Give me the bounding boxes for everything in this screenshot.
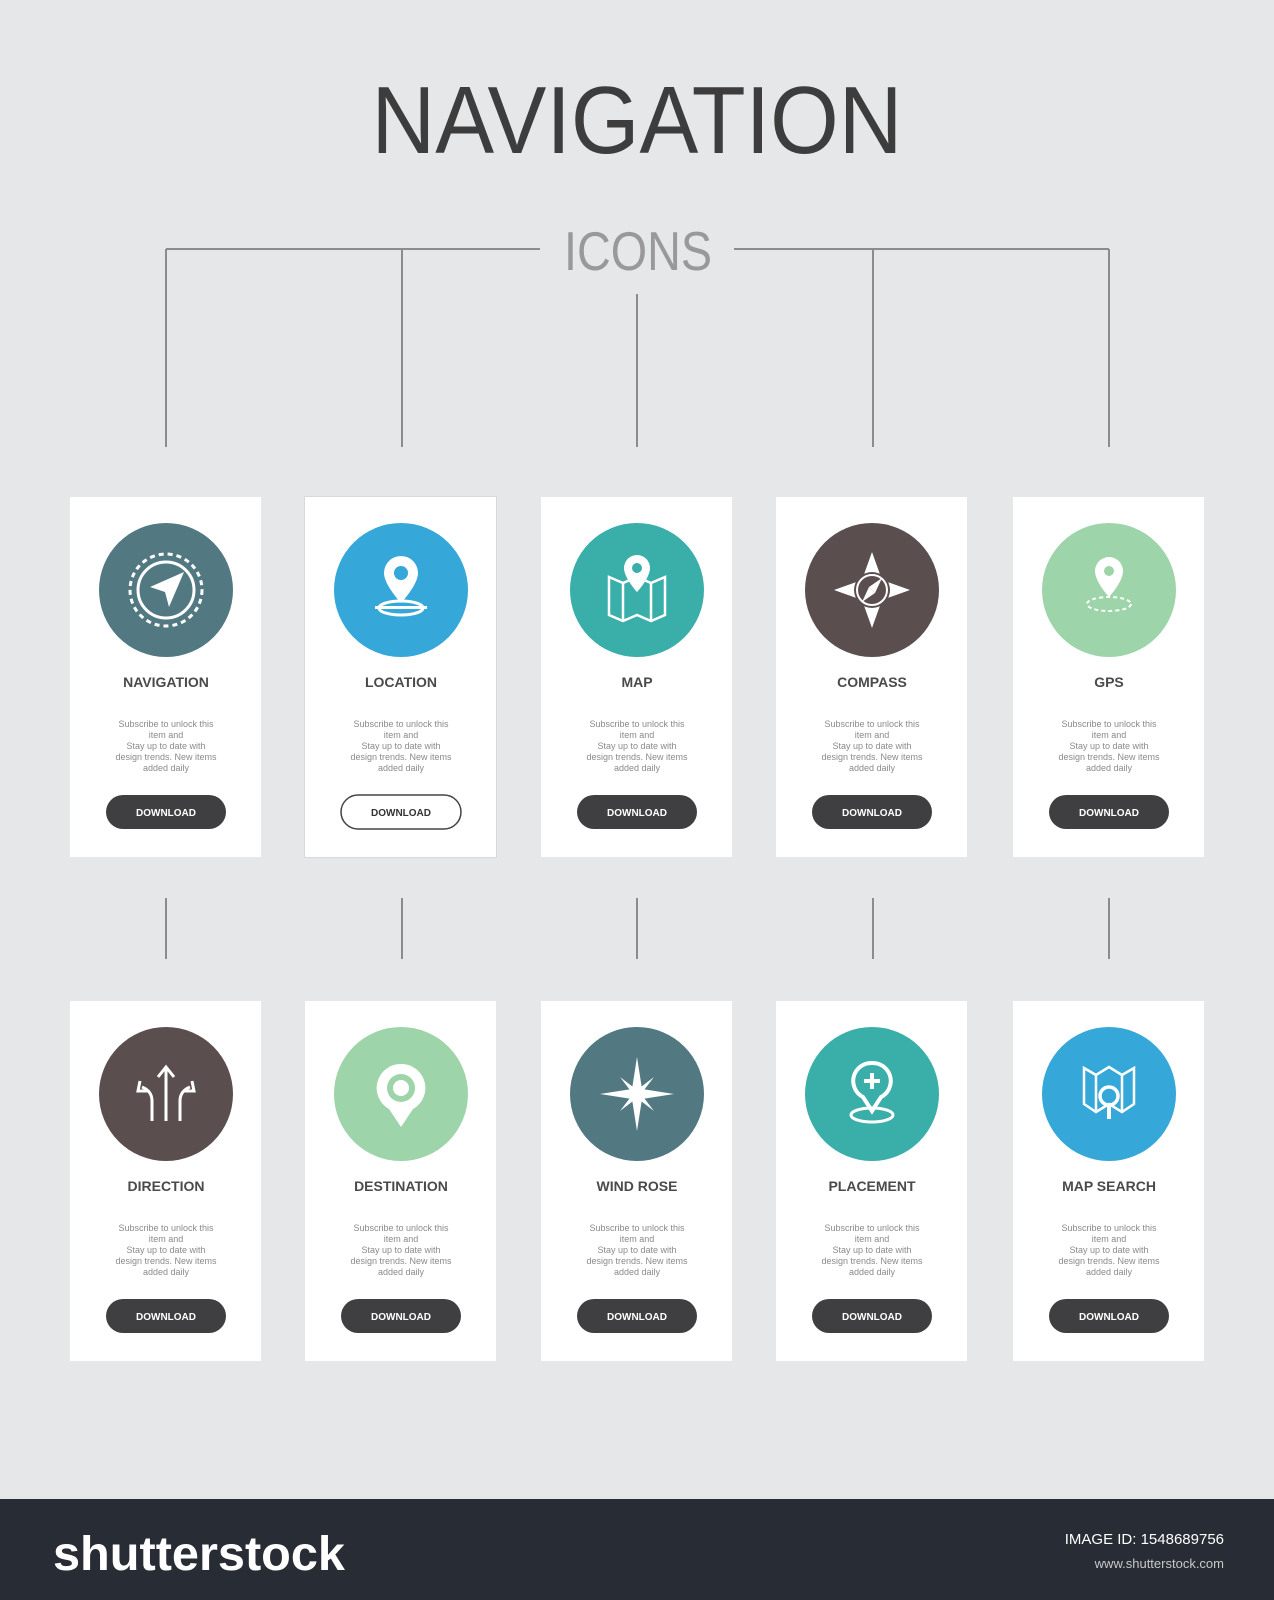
- footer bar: www.shutterstock.com: [1094, 1556, 1224, 1571]
- card: map search: Stay up to date with: [1069, 1245, 1149, 1255]
- card: map: added daily: [614, 763, 661, 773]
- card: map search: design trends. New items: [1058, 1256, 1160, 1266]
- card: gps: Subscribe to unlock this: [1061, 719, 1157, 729]
- card: map search: added daily: [1086, 1267, 1133, 1277]
- card: navigation: Subscribe to unlock this: [118, 719, 214, 729]
- footer bar: [0, 1499, 1274, 1600]
- card: location: Stay up to date with: [361, 741, 441, 751]
- card: direction: Stay up to date with: [126, 1245, 206, 1255]
- card: gps: DOWNLOAD: [1079, 808, 1139, 819]
- card: direction: design trends. New items: [115, 1256, 217, 1266]
- card: map: [541, 497, 732, 857]
- card: placement: DOWNLOAD: [842, 1312, 902, 1323]
- icon: wind rose star: [600, 1057, 674, 1131]
- card: direction: Subscribe to unlock this: [118, 1223, 214, 1233]
- icon: navigation arrow: [130, 554, 202, 626]
- card: destination: Subscribe to unlock this: [353, 1223, 449, 1233]
- card: map: Stay up to date with: [597, 741, 677, 751]
- card: placement: [776, 1001, 967, 1361]
- card: map: Subscribe to unlock this: [589, 719, 685, 729]
- card: direction: [70, 1001, 261, 1361]
- card: navigation: design trends. New items: [115, 752, 217, 762]
- connector lines: [166, 249, 1109, 959]
- card: wind rose: [541, 1001, 732, 1361]
- card: compass: DOWNLOAD: [842, 808, 902, 819]
- card: wind rose: design trends. New items: [586, 1256, 688, 1266]
- card: destination: DOWNLOAD: [371, 1312, 431, 1323]
- card: navigation: item and: [149, 730, 183, 740]
- subtitle: ICONS: ICONS: [564, 220, 712, 282]
- icon: map search: [1084, 1067, 1134, 1119]
- card: wind rose: Subscribe to unlock this: [589, 1223, 685, 1233]
- card: gps: item and: [1092, 730, 1126, 740]
- card: gps: GPS: [1094, 674, 1124, 690]
- card: compass: item and: [855, 730, 889, 740]
- card: placement: design trends. New items: [821, 1256, 923, 1266]
- card: wind rose: Stay up to date with: [597, 1245, 677, 1255]
- card: navigation: NAVIGATION: [123, 674, 209, 690]
- card: direction: item and: [149, 1234, 183, 1244]
- footer bar: shutterstock: [53, 1528, 345, 1581]
- card: map: design trends. New items: [586, 752, 688, 762]
- card: destination: item and: [384, 1234, 418, 1244]
- card: compass: COMPASS: [837, 674, 907, 690]
- card: direction: added daily: [143, 1267, 190, 1277]
- card: wind rose: DOWNLOAD: [607, 1312, 667, 1323]
- card: map search: item and: [1092, 1234, 1126, 1244]
- card: map: DOWNLOAD: [607, 808, 667, 819]
- card: gps: added daily: [1086, 763, 1133, 773]
- card: placement: Subscribe to unlock this: [824, 1223, 920, 1233]
- card: map search: MAP SEARCH: [1062, 1178, 1156, 1194]
- card: direction: DOWNLOAD: [136, 1312, 196, 1323]
- card: wind rose: added daily: [614, 1267, 661, 1277]
- icon: placement pin with plus: [851, 1063, 893, 1122]
- card: gps: Stay up to date with: [1069, 741, 1149, 751]
- card: compass: [776, 497, 967, 857]
- card: compass: Stay up to date with: [832, 741, 912, 751]
- icon: destination pin: [377, 1064, 425, 1127]
- card: placement: added daily: [849, 1267, 896, 1277]
- card: compass: added daily: [849, 763, 896, 773]
- card: gps: [1013, 497, 1204, 857]
- icon: direction arrows: [138, 1067, 194, 1121]
- icon: compass: [834, 552, 910, 628]
- card: placement: Stay up to date with: [832, 1245, 912, 1255]
- card: placement: PLACEMENT: [828, 1178, 916, 1194]
- card: location: design trends. New items: [350, 752, 452, 762]
- card: map: item and: [620, 730, 654, 740]
- card: wind rose: WIND ROSE: [597, 1178, 677, 1194]
- footer bar: IMAGE ID: 1548689756: [1065, 1531, 1224, 1548]
- card: navigation: Stay up to date with: [126, 741, 206, 751]
- card: compass: design trends. New items: [821, 752, 923, 762]
- card: gps: design trends. New items: [1058, 752, 1160, 762]
- card: navigation: added daily: [143, 763, 190, 773]
- card: map search: Subscribe to unlock this: [1061, 1223, 1157, 1233]
- title: NAVIGATION: [372, 67, 902, 174]
- card: map search: DOWNLOAD: [1079, 1312, 1139, 1323]
- card: location: item and: [384, 730, 418, 740]
- icon: map: [609, 555, 665, 621]
- card: direction: DIRECTION: [128, 1178, 204, 1194]
- card: destination: Stay up to date with: [361, 1245, 441, 1255]
- card: location: Subscribe to unlock this: [353, 719, 449, 729]
- card: location: DOWNLOAD: [371, 808, 431, 819]
- card: map search: [1013, 1001, 1204, 1361]
- card: destination: [305, 1001, 496, 1361]
- card: location: [304, 496, 497, 858]
- card: compass: Subscribe to unlock this: [824, 719, 920, 729]
- card: placement: item and: [855, 1234, 889, 1244]
- card: location: LOCATION: [365, 674, 437, 690]
- icon: gps pin: [1087, 557, 1131, 611]
- card: navigation: DOWNLOAD: [136, 808, 196, 819]
- card: location: added daily: [378, 763, 425, 773]
- card: destination: DESTINATION: [354, 1178, 448, 1194]
- card: map: MAP: [621, 674, 653, 690]
- card: wind rose: item and: [620, 1234, 654, 1244]
- card: destination: design trends. New items: [350, 1256, 452, 1266]
- card: navigation: [70, 497, 261, 857]
- card: destination: added daily: [378, 1267, 425, 1277]
- icon: location pin: [375, 556, 427, 615]
